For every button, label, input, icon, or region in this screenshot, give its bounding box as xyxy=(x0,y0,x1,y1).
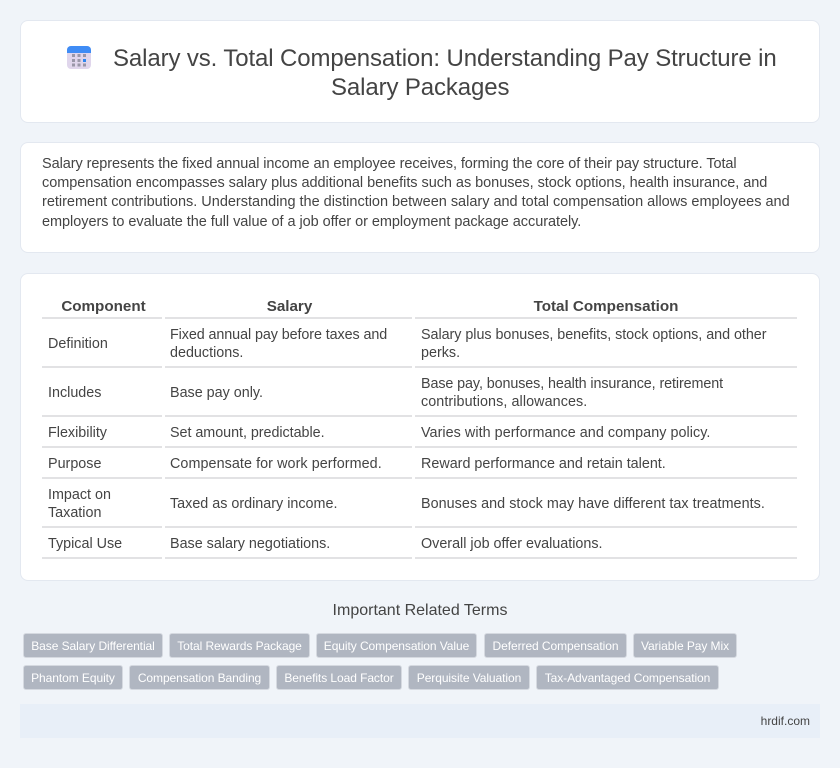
intro text xyxy=(42,156,790,230)
intro text: employers to evaluate the full value of a job offer or employment package accurately. xyxy=(42,214,581,230)
related term chips: Deferred Compensation xyxy=(493,639,618,653)
row: Purpose xyxy=(48,456,666,472)
footer source: hrdif.com xyxy=(761,714,810,728)
heading: related terms: Important Related Terms xyxy=(333,602,507,619)
related term chips xyxy=(23,633,737,690)
row: Definition: Definition xyxy=(48,336,108,352)
related term chips: Phantom Equity xyxy=(31,671,115,685)
row: Typical Use xyxy=(48,536,603,552)
row: Impact on Taxation: Bonuses and stock may have different tax treatments. xyxy=(421,496,765,512)
row: Flexibility xyxy=(48,425,710,441)
row: Purpose: Compensate for work performed. xyxy=(170,456,382,472)
title: Salary vs. Total Compensation: Understanding Pay Structure in xyxy=(113,45,777,72)
icon: calendar xyxy=(67,46,91,69)
row: Includes xyxy=(48,376,723,410)
row: Purpose: Purpose xyxy=(48,456,101,472)
row: Impact on Taxation xyxy=(48,487,765,521)
intro text: retirement contributions. Understanding the distinction between salary and total compensation allows employees and xyxy=(42,194,790,210)
row: Definition: perks. xyxy=(421,345,460,361)
related term chips: Variable Pay Mix xyxy=(641,639,729,653)
related term chips: Equity Compensation Value xyxy=(324,639,469,653)
table header: Salary xyxy=(267,298,312,315)
table header: Component xyxy=(61,298,146,315)
row: Includes: Base pay, bonuses, health insurance, retirement xyxy=(421,376,723,392)
row: Includes: Includes xyxy=(48,385,101,401)
row: Flexibility: Flexibility xyxy=(48,425,107,441)
title: Salary Packages xyxy=(331,74,509,101)
row: Impact on Taxation: Impact on xyxy=(48,487,111,503)
row: Includes: contributions, allowances. xyxy=(421,394,587,410)
row: Impact on Taxation: Taxation xyxy=(48,505,101,521)
related term chips: Base Salary Differential xyxy=(31,639,155,653)
row: Impact on Taxation: Taxed as ordinary income. xyxy=(170,496,337,512)
row: Definition: Salary plus bonuses, benefits, stock options, and other xyxy=(421,327,766,343)
row: Flexibility: Varies with performance and company policy. xyxy=(421,425,710,441)
panel: title header xyxy=(20,20,820,123)
row: Typical Use: Overall job offer evaluations. xyxy=(421,536,603,552)
table header xyxy=(61,298,678,315)
row: Definition: deductions. xyxy=(170,345,243,361)
row: Typical Use: Typical Use xyxy=(48,536,122,552)
footer bar xyxy=(20,704,820,738)
row: Flexibility: Set amount, predictable. xyxy=(170,425,325,441)
panel: comparison table xyxy=(20,273,820,581)
related term chips: Benefits Load Factor xyxy=(284,671,394,685)
related term chips: Compensation Banding xyxy=(138,671,261,685)
row: Definition xyxy=(48,327,766,361)
table header: Total Compensation xyxy=(534,298,678,315)
row: Typical Use: Base salary negotiations. xyxy=(170,536,330,552)
intro text: compensation encompasses salary plus additional benefits such as bonuses, stock options, health insurance, and xyxy=(42,175,767,191)
row: Includes: Base pay only. xyxy=(170,385,263,401)
related term chips: Total Rewards Package xyxy=(177,639,302,653)
row: Purpose: Reward performance and retain talent. xyxy=(421,456,666,472)
title xyxy=(113,45,777,101)
intro text: Salary represents the fixed annual income an employee receives, forming the core of their pay structure. Total xyxy=(42,156,737,172)
related term chips: Tax-Advantaged Compensation xyxy=(545,671,710,685)
related term chips: Perquisite Valuation xyxy=(417,671,521,685)
row: Definition: Fixed annual pay before taxes and xyxy=(170,327,387,343)
panel: intro paragraph xyxy=(20,142,820,253)
